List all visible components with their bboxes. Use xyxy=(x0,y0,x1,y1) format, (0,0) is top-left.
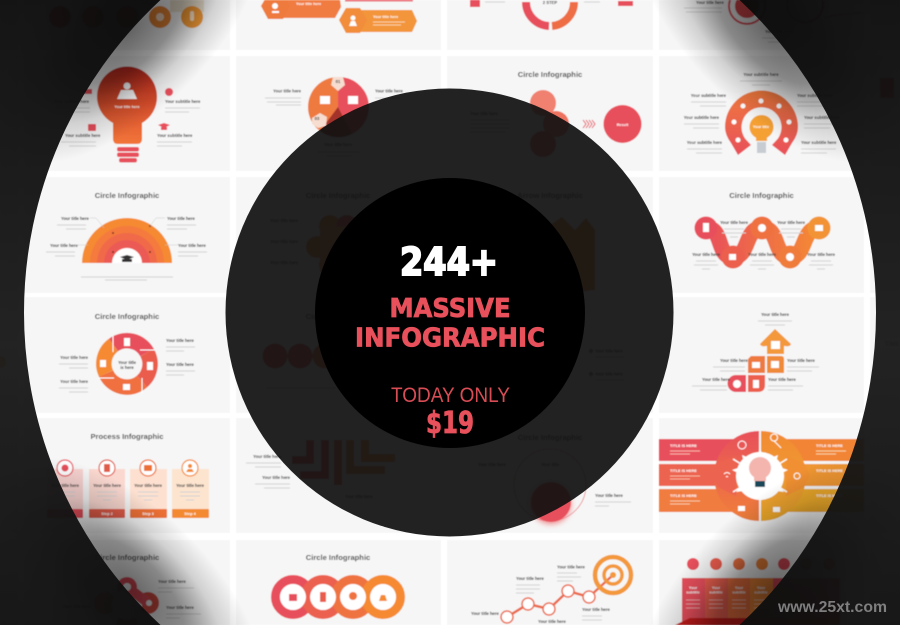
slide: columns: subtitle xyxy=(732,590,746,594)
slide: pie: Your title here xyxy=(375,88,404,94)
slide: pie: Your title here xyxy=(324,142,353,147)
dark inner circle xyxy=(226,88,674,536)
slide: columns: subtitle xyxy=(754,590,768,594)
slide: linked rings: Your title here xyxy=(158,579,187,584)
slide: donut: Your title here xyxy=(166,338,195,343)
slide: list items: Your title here xyxy=(595,372,624,376)
slide: linked rings xyxy=(24,540,230,625)
slide: columns: subtitle xyxy=(709,590,723,594)
slide: house arrow: Your title here xyxy=(702,377,731,382)
slide: target steps xyxy=(659,0,864,50)
slide: result circles: Result xyxy=(617,123,629,127)
card 3: Step 3 xyxy=(142,512,154,516)
slide: donut: Your title here xyxy=(166,362,195,367)
slide: linked rings: Circle Infographic xyxy=(95,553,159,562)
slide: semicircle layers: Your title here xyxy=(61,216,90,221)
slide: process cards: Process Infographic xyxy=(90,432,164,441)
slide: list items xyxy=(447,297,653,413)
card 1 xyxy=(47,460,83,518)
slide: arrows: Your title here xyxy=(262,475,291,480)
slide: horseshoe with bulb: Your subtitle here xyxy=(687,140,723,145)
slide: arrows: Your title here xyxy=(345,494,374,499)
slide: steps to target: Your title here xyxy=(557,564,586,570)
slide: bulb with bands xyxy=(659,418,864,533)
slide: bulb with bands: TITLE IS HERE xyxy=(816,469,843,473)
slide: light bulb: Your title here xyxy=(114,105,140,109)
slide: target steps: Your title here xyxy=(765,29,794,34)
slide: pie: 03 xyxy=(315,116,320,121)
card 2 xyxy=(89,460,125,518)
headline: massive infographic xyxy=(355,294,545,354)
card 3 xyxy=(130,460,167,518)
slide: list items: Your title here xyxy=(595,348,624,354)
slide: wave: Your title here xyxy=(748,252,777,257)
slide: chain ring: Circle Infographic xyxy=(306,553,370,562)
slide: hexagon cluster: Your title here xyxy=(270,218,299,223)
card 2: Step 2 xyxy=(101,512,113,516)
slide: semicircle layers: Your title here xyxy=(50,243,79,248)
slide: horseshoe with bulb: Your subtitle here xyxy=(801,140,837,145)
slide: hexagon list: Your title here xyxy=(373,15,398,19)
card 4: Your title here xyxy=(176,483,205,488)
slide: pie: 01 xyxy=(336,79,341,84)
slide: bulb with bands: TITLE IS HERE xyxy=(670,469,697,473)
slide: horseshoe with bulb: Your title xyxy=(753,125,769,129)
slide: wave: Your title here xyxy=(692,252,721,257)
slide: steps to target: Your title here xyxy=(538,619,567,624)
slide: bulb with bands: TITLE IS HERE xyxy=(816,494,843,498)
card 3: Your title here xyxy=(134,483,163,488)
slide: horseshoe with bulb: Your subtitle here xyxy=(804,115,840,120)
watermark: www.25xt.com xyxy=(777,599,887,616)
headline: massive infographic: MASSIVE xyxy=(390,294,510,324)
slide: chain of circles xyxy=(24,0,230,50)
slide: steps to target: Your title here xyxy=(516,576,545,581)
slide: horseshoe with bulb: Your subtitle here xyxy=(691,93,727,98)
slide: columns: Your xyxy=(757,586,766,590)
card 2: Your title here xyxy=(93,483,122,488)
slide: light bulb: Your subtitle here xyxy=(54,99,90,104)
slide: columns: Your xyxy=(689,586,698,590)
slide: hexagon cluster xyxy=(236,177,441,293)
slide: horseshoe with bulb: Your subtitle here xyxy=(684,115,720,120)
slide: arrows: Your title here xyxy=(253,454,282,459)
slide: donut xyxy=(24,297,230,413)
slide: bulb with bands: TITLE IS HERE xyxy=(816,444,843,448)
slide: horseshoe with bulb: Your subtitle here xyxy=(797,93,833,98)
slide: steps to target: Your title here xyxy=(582,607,611,612)
headline: 244+: 244+ xyxy=(400,240,498,284)
slide: semicircle layers: Your title here xyxy=(167,216,196,221)
slide: big ring: Your title xyxy=(541,462,560,467)
slide: columns: subtitle xyxy=(686,590,700,594)
slide: pie xyxy=(236,56,441,171)
slide: circle row xyxy=(236,297,441,413)
slide: big ring: Your title here xyxy=(595,493,624,498)
slide: bulb with bands: TITLE IS HERE xyxy=(670,494,697,498)
slide: wave: Your title here xyxy=(720,220,749,225)
slide: light bulb xyxy=(24,56,230,171)
slide: process cards xyxy=(24,418,230,533)
slide: house arrow xyxy=(659,297,864,413)
slide: hexagon cluster: Your title here xyxy=(270,260,299,265)
slide: steps to target: Your title here xyxy=(471,611,500,616)
slide: hexagon list: Your title here xyxy=(296,2,321,6)
slide: circle row: Circle Infographic xyxy=(306,312,370,321)
slide: result circles: Circle Infographic xyxy=(518,70,582,79)
slide: columns: Your xyxy=(712,586,721,590)
slide: big ring: Circle Infographic xyxy=(518,433,582,442)
slide: donut: Your title xyxy=(118,360,137,365)
price: $19 xyxy=(426,406,474,441)
slide: wave: Your title here xyxy=(777,220,806,225)
slide: steps to target xyxy=(447,540,653,625)
slide: result circles: Your title here xyxy=(470,111,499,116)
slide: semicircle layers: Circle Infographic xyxy=(95,191,159,200)
slide: arrow infographic: Arrow Infographic xyxy=(517,191,583,200)
slide: bulb with bands: TITLE IS HERE xyxy=(670,444,697,448)
slide: linked rings: Your title here xyxy=(166,605,195,610)
headline: massive infographic: INFOGRAPHIC xyxy=(355,324,545,354)
slide: linked rings: Your title here xyxy=(63,604,92,609)
card 1: Your title here xyxy=(51,483,80,488)
slide: semicircle layers: Your title here xyxy=(178,243,207,248)
slide: arrow infographic xyxy=(447,177,653,293)
slide: house arrow: Your title here xyxy=(787,358,816,363)
slide: wave xyxy=(659,177,864,293)
slide: wave: Circle Infographic xyxy=(729,191,794,200)
slide: wave: Your title here xyxy=(807,252,836,257)
core black circle xyxy=(315,178,585,448)
slide: chain ring xyxy=(236,540,441,625)
slide: house arrow: Your title here xyxy=(720,358,749,363)
slide: target steps: Your title here xyxy=(696,0,725,5)
slide: hexagon cluster: Circle Infographic xyxy=(306,191,370,200)
slide: 2 step ring: 2 STEP xyxy=(543,0,557,5)
slide: light bulb: Your subtitle here xyxy=(157,133,193,138)
slide: donut: Your title here xyxy=(60,355,89,360)
slide: light bulb: Your subtitle here xyxy=(65,133,101,138)
slide: columns: Your xyxy=(735,586,744,590)
slide: light bulb: Your subtitle here xyxy=(165,99,201,104)
slide: result circles xyxy=(447,56,653,171)
slide: house arrow: Your title here xyxy=(768,377,797,382)
slide: columns xyxy=(659,540,864,625)
slide: big ring xyxy=(447,418,653,533)
offer: today only: TODAY ONLY xyxy=(391,384,510,407)
slide: horseshoe with bulb xyxy=(659,56,864,171)
slide: semicircle layers xyxy=(24,177,230,293)
slide: house arrow: Your title here xyxy=(761,312,790,317)
card 4: Step 4 xyxy=(184,512,197,516)
slide: donut: Circle Infographic xyxy=(95,312,159,321)
slide: donut: is here xyxy=(120,365,134,370)
slide: donut: Your title here xyxy=(60,379,89,384)
icon: bulb xyxy=(97,66,157,144)
slide: pie: Your title here xyxy=(273,88,302,94)
slide: hexagon list xyxy=(236,0,441,50)
card 4 xyxy=(172,460,209,518)
slide: big ring: Your title here xyxy=(478,462,507,467)
slide: 2 step ring xyxy=(447,0,653,50)
slide: horseshoe with bulb: Your subtitle here xyxy=(743,72,779,77)
outer slide columns: TIME xyxy=(885,342,899,348)
slide: arrows xyxy=(236,418,441,533)
slide: hexagon cluster: Your title here xyxy=(270,239,299,244)
